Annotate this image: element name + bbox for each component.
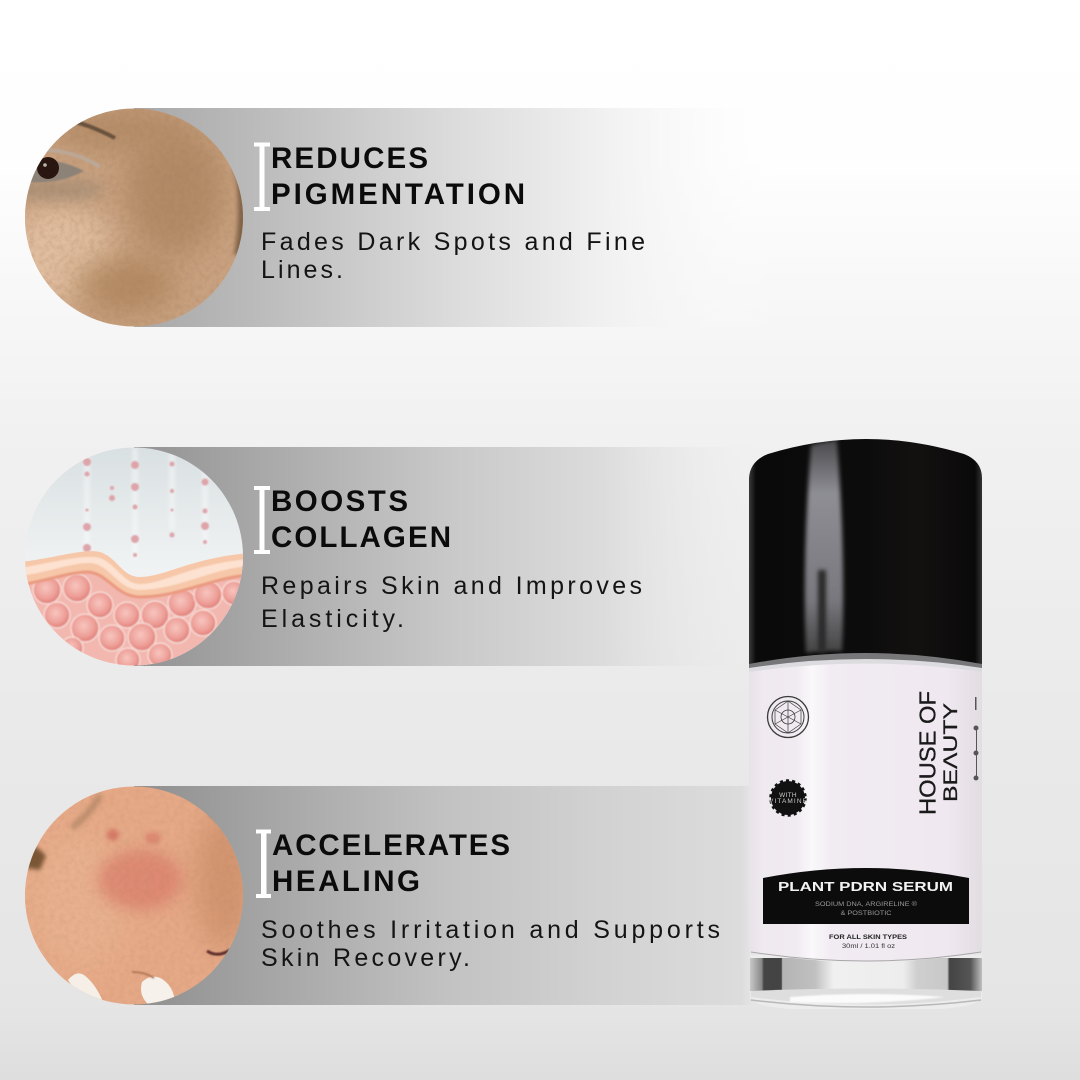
logo emblem [768,696,808,738]
heading: accelerates healing [272,829,510,898]
text: healing description [261,916,720,972]
product name block: PLANT PDRN SERUM [778,879,953,894]
product: serum bottle [749,439,982,1009]
bottle base [750,955,982,1009]
product name block: SODIUM DNA, ARGIRELINE ® [815,901,918,908]
heading: reduces pigmentation [271,142,525,211]
panel: boosts collagen [25,447,668,666]
bottle body label [749,664,982,962]
heading: reduces pigmentation: REDUCES [271,142,428,175]
brand name [914,691,962,815]
icon: irritated skin photo [25,786,255,1010]
panel: accelerates healing [25,786,760,1010]
text: pigmentation description: Lines. [261,256,343,284]
panel: reduces pigmentation [25,108,646,327]
product name block [763,868,969,924]
badge: with vitamin: WITH [779,792,797,799]
text: pigmentation description [261,228,645,284]
badge: with vitamin [769,781,808,815]
text: healing description: Skin Recovery. [261,944,470,972]
heading: accelerates healing: ACCELERATES [272,829,510,862]
product name block: & POSTBIOTIC [840,910,892,917]
product details: FOR ALL SKIN TYPES [829,934,908,941]
heading: accelerates healing: HEALING [272,865,420,898]
text: collagen description: Elasticity. [261,605,404,633]
bottle cap [749,439,982,672]
icon: heading bracket [254,144,270,209]
icon: heading bracket [254,488,270,552]
badge: with vitamin: VITAMINE [769,798,808,805]
product details [829,934,908,950]
text: collagen description: Repairs Skin and Improves [261,572,642,600]
text: healing description: Soothes Irritation and Supports [261,916,720,944]
icon: heading bracket [256,832,271,896]
text: collagen description [261,572,642,633]
brand name: BEΛUTY [940,703,962,802]
icon: pigmented skin photo [25,108,243,326]
brand name: HOUSE OF [914,691,940,815]
heading: reduces pigmentation: PIGMENTATION [271,178,525,211]
text: pigmentation description: Fades Dark Spots and Fine [261,228,645,256]
heading: boosts collagen: BOOSTS [271,485,408,518]
side details [974,697,978,780]
icon: collagen skin layers [20,447,250,672]
heading: boosts collagen: COLLAGEN [271,521,451,554]
heading: boosts collagen [271,485,451,554]
product details: 30ml / 1.01 fl oz [842,943,896,950]
